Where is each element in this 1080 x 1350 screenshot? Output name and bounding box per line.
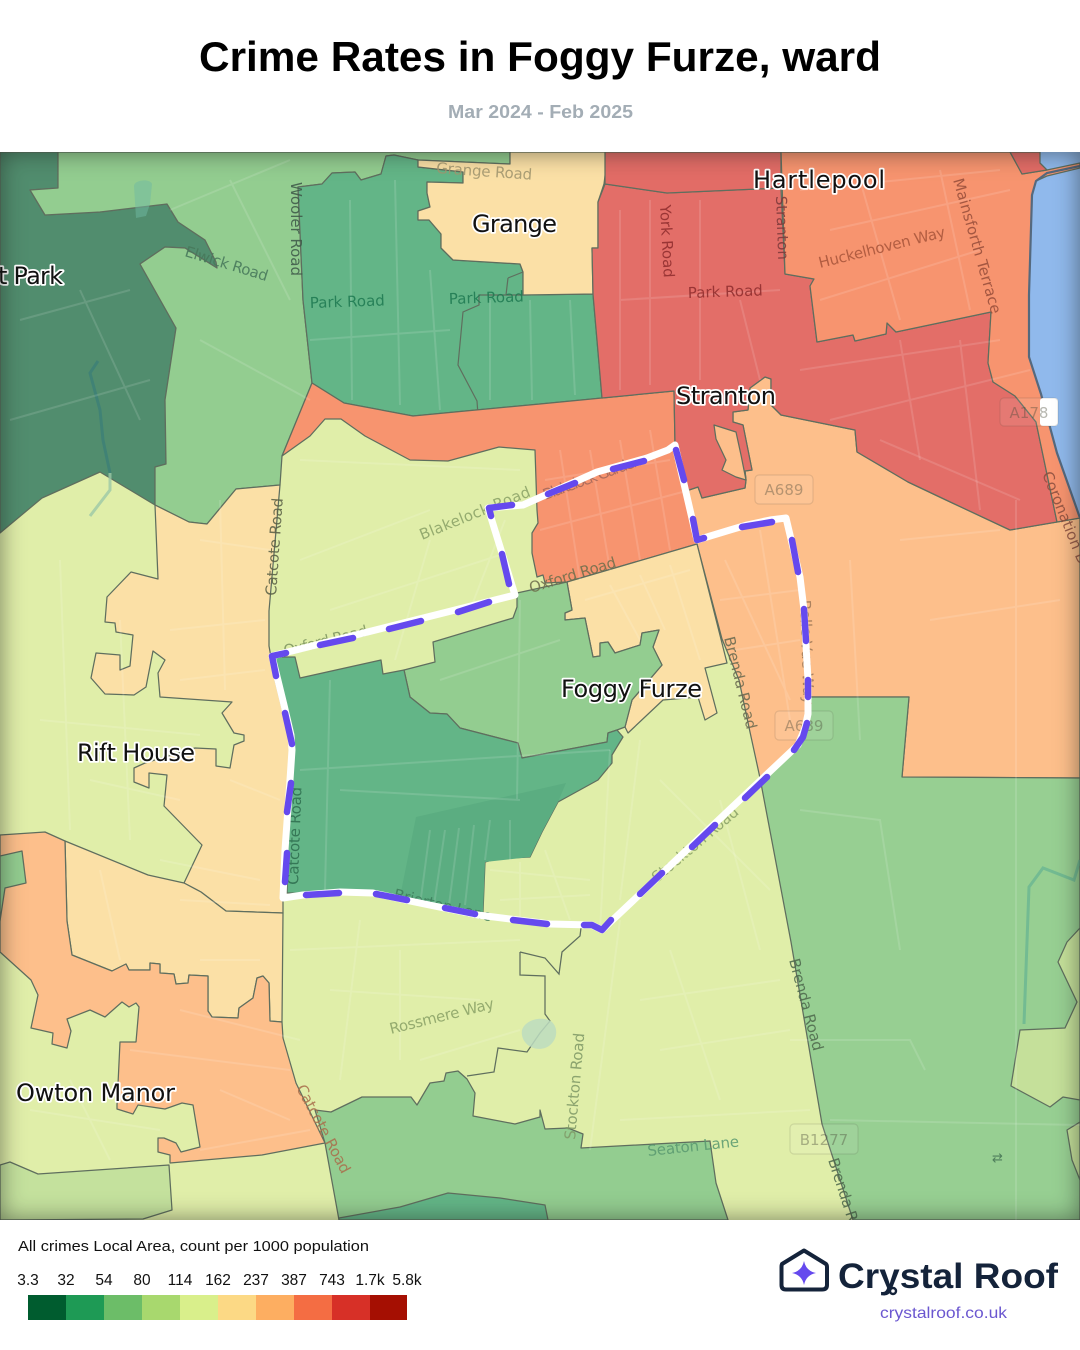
area: far east lower pocket [1067, 1122, 1080, 1180]
road label: Brenda Road middle: Brenda Road [785, 956, 827, 1053]
area: Rift House pale yellow [91, 485, 292, 913]
area: far east pockets [1011, 928, 1080, 1107]
road label: Catcote Road ward: Catcote Road [284, 787, 305, 885]
area: Park Road green [298, 155, 602, 416]
subtitle: date range: Mar 2024 - Feb 2025 [448, 102, 633, 122]
place label: Rift House: Rift House [77, 739, 195, 767]
area: north-east red corner [1010, 152, 1047, 174]
area: central salmon band [282, 383, 697, 583]
legend scale labels: 32 [57, 1272, 75, 1289]
ward boundary, white base [272, 445, 808, 930]
road badge: A689 south: A689 [785, 717, 823, 735]
stream lower reach [90, 473, 110, 516]
area: orange island [714, 425, 746, 480]
road label: Stockton Road south: Stockton Road [561, 1032, 588, 1140]
road badge: B1277: B1277 [800, 1131, 848, 1149]
legend [17, 1239, 422, 1320]
road label: Brenda Road north: Brenda Road [720, 635, 761, 731]
road label: Stockton Road ward: Stockton Road [648, 803, 742, 886]
place label: Owton Manor: Owton Manor [16, 1079, 175, 1107]
place label: Grange: Grange [472, 210, 557, 238]
area: Stranton red [592, 184, 1057, 530]
road label: Huckelhoven Way: Huckelhoven Way [817, 223, 947, 272]
area: Grange pale yellow [418, 152, 608, 295]
area boundary inside Park Road green [458, 272, 523, 415]
pond [522, 1019, 556, 1049]
legend scale labels [17, 1272, 422, 1289]
rail station symbol: ⇄ [992, 1151, 1003, 1166]
legend scale labels: 387 [281, 1272, 307, 1289]
area: south-east light green [760, 697, 1080, 1220]
area: south-west pale yellow [65, 841, 283, 1022]
road badge: A689 south [775, 711, 833, 740]
road badge: A689 north: A689 [765, 481, 803, 499]
area: Hartlepool east salmon [781, 152, 1080, 522]
road label: Seaton Lane: Seaton Lane [647, 1132, 740, 1160]
stream [90, 361, 110, 473]
road label: Park Road west: Park Road [310, 291, 385, 312]
area: south-west lighter green [0, 1162, 172, 1220]
legend scale labels: 237 [243, 1272, 269, 1289]
area: west park, darkest green [0, 152, 217, 533]
road label: Brierton Lane: Brierton Lane [392, 885, 494, 925]
legend title: All crimes Local Area, count per 1000 population [18, 1239, 369, 1255]
road label: Belle Vue Way: Belle Vue Way [796, 600, 818, 705]
area: north red [605, 152, 781, 193]
area: central pale yellow [565, 544, 727, 733]
road label: Catcote Road north: Catcote Road [262, 497, 287, 596]
area: west edge green pocket [0, 851, 26, 921]
road badge: A689 north [755, 475, 813, 504]
area: central light green [404, 582, 662, 758]
legend scale labels: 54 [95, 1272, 113, 1289]
road label: Grange Road: Grange Road [436, 159, 533, 184]
road label: Oxford Road east: Oxford Road [527, 553, 618, 597]
choropleth map [0, 152, 1080, 1220]
map edge vignette [0, 152, 1080, 1220]
road label: York Road: York Road [656, 203, 678, 278]
road label: Blakelock Gardens: Blakelock Gardens [540, 449, 650, 504]
road label: Blakelock Road: Blakelock Road [417, 483, 533, 544]
area: big east orange [686, 377, 1080, 778]
title: Crime Rates in Foggy Furze, ward [199, 33, 881, 80]
legend scale labels: 5.8k [392, 1272, 422, 1289]
legend scale labels: 1.7k [355, 1272, 385, 1289]
icon: house with star [782, 1250, 827, 1290]
road label: Wooler Road: Wooler Road [287, 182, 305, 276]
legend scale labels: 743 [319, 1272, 345, 1289]
area: north-west light green [30, 152, 510, 524]
road label: Rossmere Way: Rossmere Way [388, 995, 496, 1038]
darker estate inside ward [400, 783, 566, 912]
brand name: Crystal Roof [838, 1257, 1058, 1296]
brand url: crystalroof.co.uk [880, 1305, 1008, 1322]
road label: Stranton: Stranton [772, 196, 792, 260]
road label: Oxford Road west: Oxford Road [282, 622, 369, 660]
area: Owton Manor orange [0, 832, 325, 1163]
legend scale labels: 162 [205, 1272, 231, 1289]
area: ward south-west green [275, 657, 623, 912]
legend colour bar [28, 1295, 407, 1320]
north-west pond [134, 180, 152, 218]
road label: Catcote Road south: Catcote Road [292, 1081, 354, 1176]
road label: Park Road middle: Park Road [449, 287, 524, 308]
road badge: A178: A178 [1010, 404, 1048, 422]
area boundaries in the yellow-green [467, 928, 581, 1076]
legend scale labels: 80 [133, 1272, 151, 1289]
coastline [1029, 166, 1080, 518]
road label: Park Road east: Park Road [688, 281, 763, 302]
place label: Foggy Furze: Foggy Furze [561, 675, 702, 703]
road label: Elwick Road: Elwick Road [183, 243, 270, 285]
legend scale labels: 3.3 [17, 1272, 39, 1289]
place label: Stranton: Stranton [676, 382, 776, 410]
road badge: A178 [1000, 398, 1058, 426]
street network [10, 160, 1080, 1220]
eastern stream [1024, 860, 1080, 1024]
road label: Mainsforth Terrace: Mainsforth Terrace [949, 176, 1005, 316]
keyhole tail on the y [890, 1288, 896, 1294]
ward boundary, purple dashes [272, 450, 808, 930]
area: south light green [315, 1071, 728, 1220]
road badge: B1277 [790, 1124, 858, 1154]
brand logo [780, 1248, 1058, 1322]
place label: Hartlepool: Hartlepool [753, 166, 885, 194]
sea [1020, 152, 1080, 552]
legend scale labels: 114 [168, 1272, 193, 1289]
area: south green [339, 1193, 548, 1220]
